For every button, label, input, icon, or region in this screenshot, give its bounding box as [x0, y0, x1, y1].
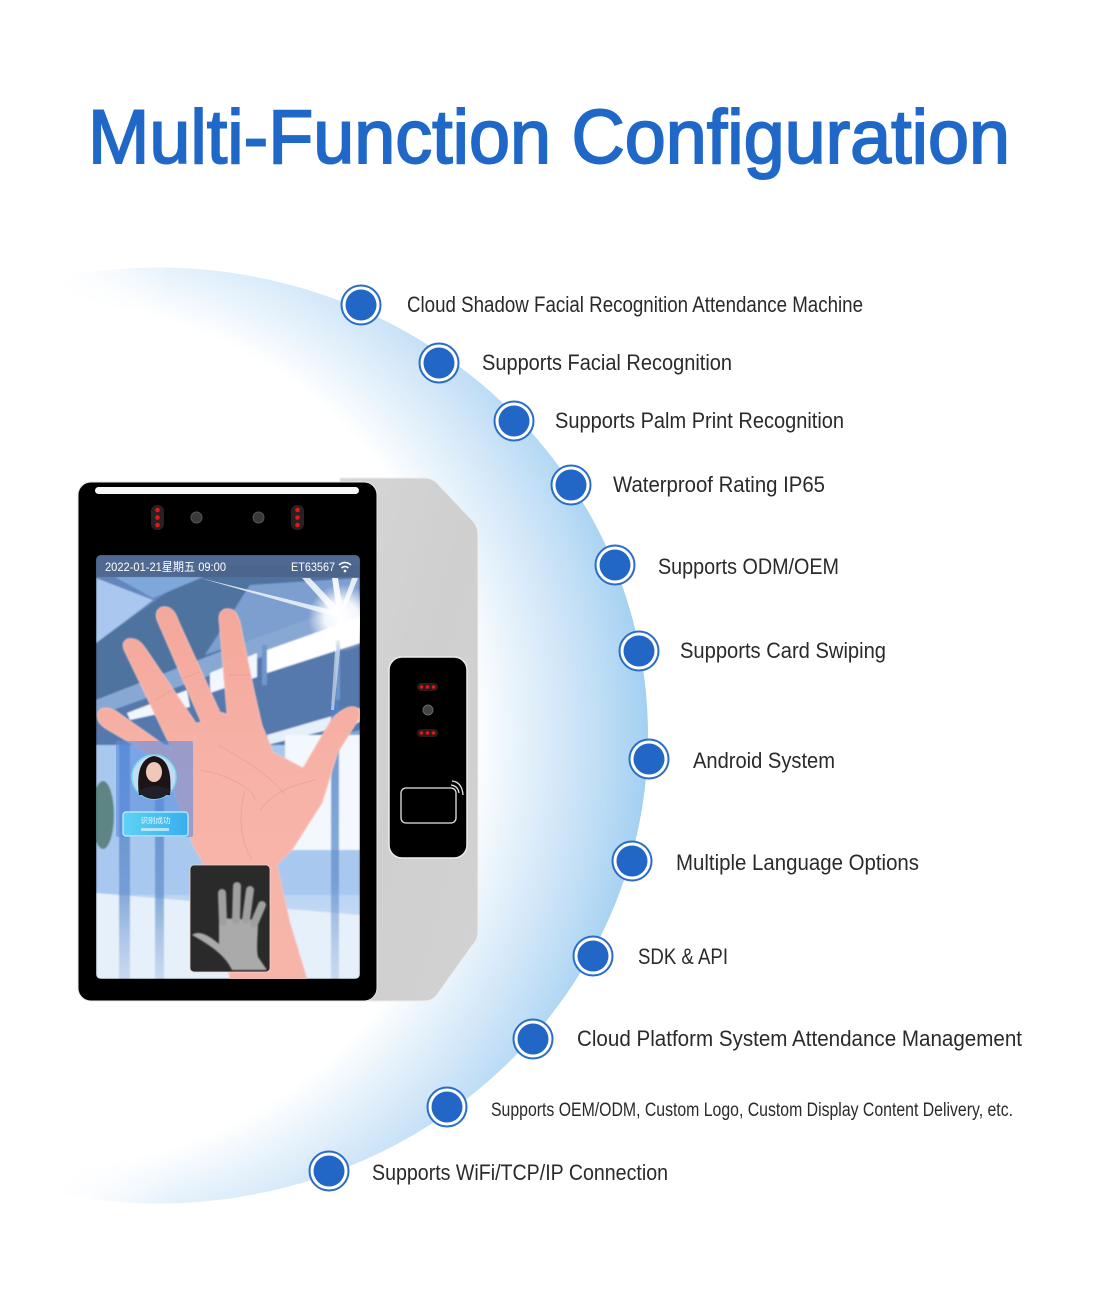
palm lines [155, 672, 315, 860]
feature 11 [428, 1088, 1013, 1126]
feature 4 [552, 466, 825, 504]
feature 11: Supports OEM/ODM, Custom Logo, Custom Display Content Delivery, etc. [491, 1100, 1013, 1121]
feature 8 [612, 842, 919, 880]
feature list [310, 286, 1022, 1190]
feature 1 [342, 286, 863, 324]
status bar [96, 555, 360, 577]
device id: ET63567 [291, 560, 335, 574]
sun glare [200, 578, 376, 710]
scanned hand [192, 886, 267, 970]
palm vein scan preview [190, 865, 270, 972]
feature 6 [620, 632, 886, 670]
feature 7: Android System [693, 748, 835, 773]
device: attendance terminal [78, 478, 478, 1001]
screen office photo background [92, 555, 360, 979]
date and time: 2022-01-21星期五 09:00 [105, 560, 226, 574]
left camera [191, 512, 202, 523]
feature 3: Supports Palm Print Recognition [555, 408, 844, 433]
icon: wifi [339, 562, 351, 572]
right camera [253, 512, 264, 523]
hand [97, 607, 360, 979]
device black front bezel [78, 482, 377, 1001]
feature 2 [420, 344, 732, 382]
recognition success badge: 识别成功 [140, 815, 171, 825]
device grey rear body [340, 478, 478, 1001]
feature 12 [310, 1152, 668, 1190]
feature 4: Waterproof Rating IP65 [613, 472, 825, 497]
avatar portrait [132, 755, 176, 799]
feature 9: SDK & API [638, 944, 728, 969]
feature 3 [494, 402, 844, 440]
feature 1: Cloud Shadow Facial Recognition Attendance Machine [407, 292, 863, 317]
side card reader panel [389, 657, 467, 858]
left infrared sensor [151, 505, 164, 530]
feature 12: Supports WiFi/TCP/IP Connection [372, 1160, 668, 1185]
title: Multi-Function Configuration [88, 95, 1010, 180]
top light bar [95, 487, 359, 494]
feature 10: Cloud Platform System Attendance Management [577, 1026, 1022, 1051]
feature 2: Supports Facial Recognition [482, 350, 732, 375]
right infrared sensor [291, 505, 304, 530]
feature 7 [630, 740, 835, 778]
recognition card panel [116, 741, 193, 837]
feature 5: Supports ODM/OEM [658, 554, 839, 579]
reader upper infrared dots [417, 683, 438, 691]
feature 5 [596, 546, 839, 584]
feature 8: Multiple Language Options [676, 850, 919, 875]
reader camera [423, 705, 433, 715]
feature 10 [514, 1020, 1022, 1058]
screen [92, 555, 376, 979]
feature 6: Supports Card Swiping [680, 638, 886, 663]
icon: card swipe [401, 781, 463, 823]
blue arc background [0, 250, 648, 1220]
feature 9 [574, 936, 728, 976]
reader lower infrared dots [417, 729, 438, 737]
